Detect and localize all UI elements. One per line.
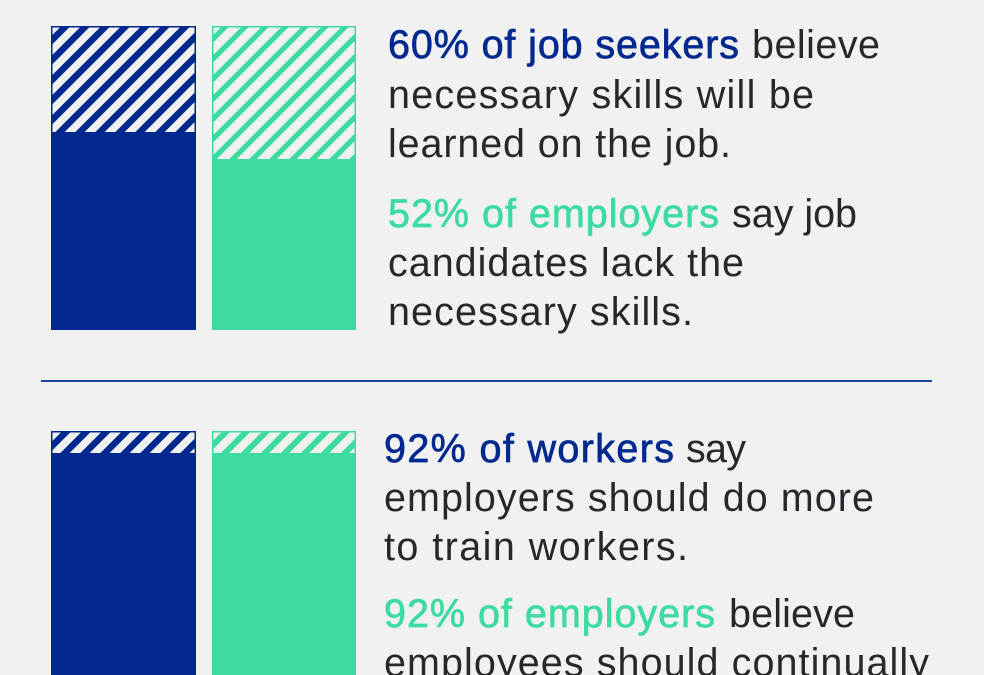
text: job seekers statistic: 60% of job seekers (388, 23, 739, 67)
text: workers statistic: say (686, 427, 746, 471)
text: job seekers statistic: learned on the job. (388, 122, 731, 166)
text: employers lack skills statistic: 52% of employers (388, 192, 719, 236)
bar chart: bottom comparison (51, 431, 356, 675)
bar: workers 92% (51, 431, 196, 675)
bar: employers 92% (212, 431, 356, 675)
text: employers training statistic: 92% of employers (384, 592, 715, 636)
bar: job seekers 60% (51, 26, 196, 330)
bar: employers 52% (212, 26, 356, 330)
text: job seekers statistic: necessary skills will be (388, 73, 814, 117)
text: employers training statistic: believe (729, 592, 855, 636)
text: employers lack skills statistic: candidates lack the (388, 241, 744, 285)
text: workers statistic: to train workers. (384, 525, 688, 569)
bar chart: top comparison (51, 26, 356, 330)
text: employers lack skills statistic: say job (732, 192, 857, 236)
text: job seekers statistic: believe (752, 23, 880, 67)
text: employers lack skills statistic: necessary skills. (388, 290, 693, 334)
text: workers statistic: 92% of workers (384, 427, 674, 471)
divider (41, 380, 932, 382)
text: workers statistic: employers should do more (384, 476, 874, 520)
